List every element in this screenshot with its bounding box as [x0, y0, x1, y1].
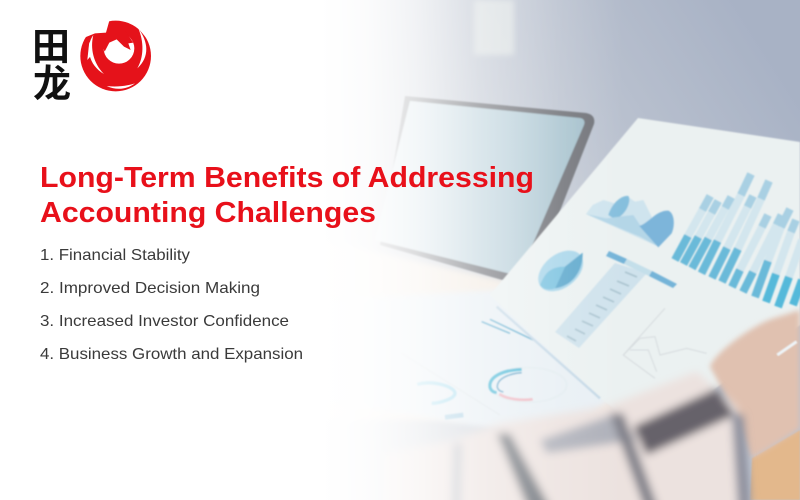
list of benefits	[40, 247, 303, 363]
list of benefits: 3. Increased Investor Confidence	[40, 313, 289, 330]
hand	[710, 310, 800, 458]
donut charts	[402, 307, 600, 417]
list of benefits: 1. Financial Stability	[40, 247, 190, 264]
logo: red dragon emblem	[77, 18, 157, 91]
desk surface	[300, 235, 620, 420]
wooden table corner	[750, 430, 800, 500]
line chart	[623, 308, 707, 378]
report sheet: lower page	[320, 290, 610, 440]
area chart	[586, 196, 674, 247]
report sheet: main page	[490, 118, 800, 430]
laptop	[375, 96, 594, 285]
logo: Chinese characters: 龙	[33, 64, 71, 106]
heading: Long-Term Benefits of Addressing	[40, 162, 534, 194]
plaid shirt sleeve	[383, 372, 753, 500]
pie chart	[530, 242, 591, 300]
heading	[40, 162, 534, 229]
logo: Chinese characters	[32, 27, 71, 106]
heading: Accounting Challenges	[40, 197, 376, 229]
list of benefits: 4. Business Growth and Expansion	[40, 346, 303, 363]
data table	[555, 251, 677, 348]
list of benefits: 2. Improved Decision Making	[40, 280, 260, 297]
bar chart	[675, 174, 800, 307]
window reflection	[474, 0, 514, 55]
logo: Chinese characters: 田	[32, 27, 70, 69]
logo	[32, 18, 157, 106]
